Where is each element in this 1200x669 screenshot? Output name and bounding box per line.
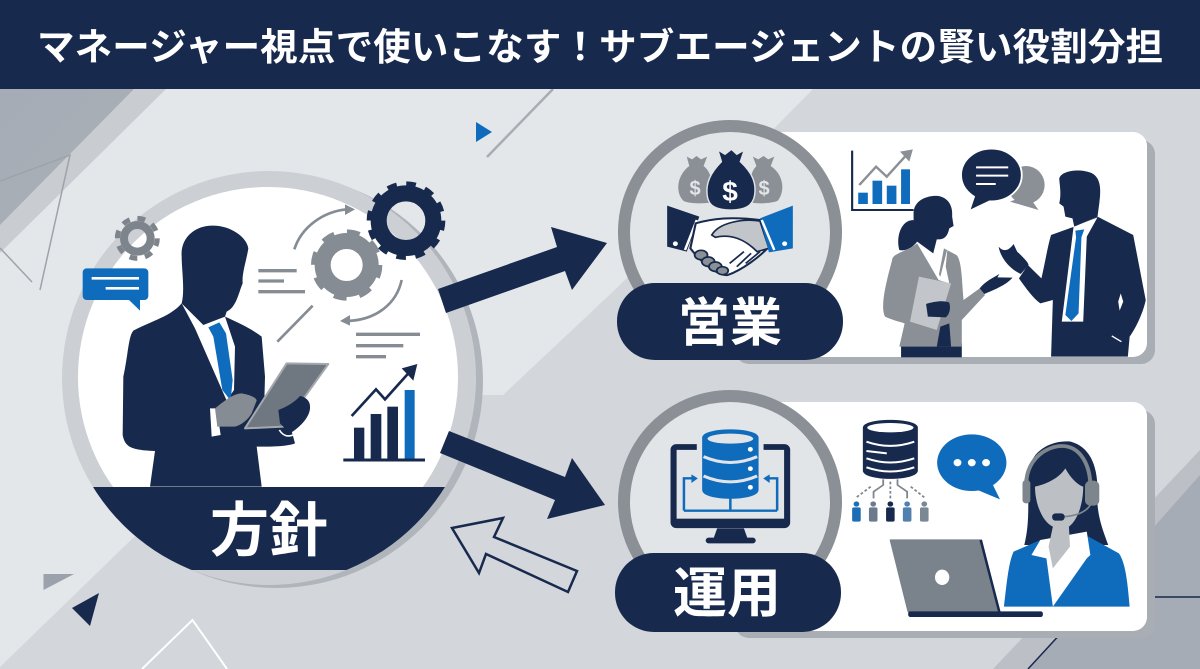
operator with headset <box>1004 441 1130 607</box>
man silhouette <box>999 171 1146 357</box>
woman silhouette <box>883 196 1012 357</box>
icon: handshake <box>667 206 793 275</box>
panel: 方針 circle <box>60 171 483 588</box>
chart: sales growth <box>852 149 914 210</box>
dollar signs: $ <box>722 176 738 207</box>
network connectors <box>856 479 924 498</box>
icon: money bags <box>678 149 782 210</box>
icon: database <box>863 420 918 479</box>
dollar signs: $ <box>689 178 701 200</box>
dollar signs <box>689 176 770 207</box>
speech bubbles <box>961 149 1045 210</box>
title: マネージャー視点で使いこなす！サブエージェントの賢い役割分担 <box>37 26 1163 68</box>
label: 運用 <box>615 553 841 632</box>
icon: chat bubble <box>83 268 148 311</box>
title <box>0 0 1200 89</box>
panel: 運用 <box>615 396 1155 638</box>
icon: navy gear <box>370 185 442 257</box>
label: 方針: 方針 <box>210 498 328 564</box>
label: 運用: 運用 <box>673 564 781 624</box>
icon: monitor with database <box>674 429 787 543</box>
arrow: feedback from 運用 to 方針 <box>452 518 577 592</box>
arrow: 方針 to 運用 <box>440 431 605 519</box>
process arrows <box>277 204 402 342</box>
icon: people <box>852 501 929 522</box>
icon: chat bubble with dots <box>937 434 1006 499</box>
label: 営業: 営業 <box>678 295 782 353</box>
icon: gray gear <box>314 233 379 297</box>
icon: small gear <box>117 218 157 258</box>
icon: laptop <box>890 540 1043 617</box>
dollar signs: $ <box>758 178 770 200</box>
panel: 営業 <box>617 126 1155 364</box>
manager silhouette <box>123 226 328 487</box>
bar chart <box>343 364 425 460</box>
text lines <box>258 271 420 357</box>
arrow: 方針 to 営業 <box>438 227 607 313</box>
label: 営業 <box>617 283 843 360</box>
